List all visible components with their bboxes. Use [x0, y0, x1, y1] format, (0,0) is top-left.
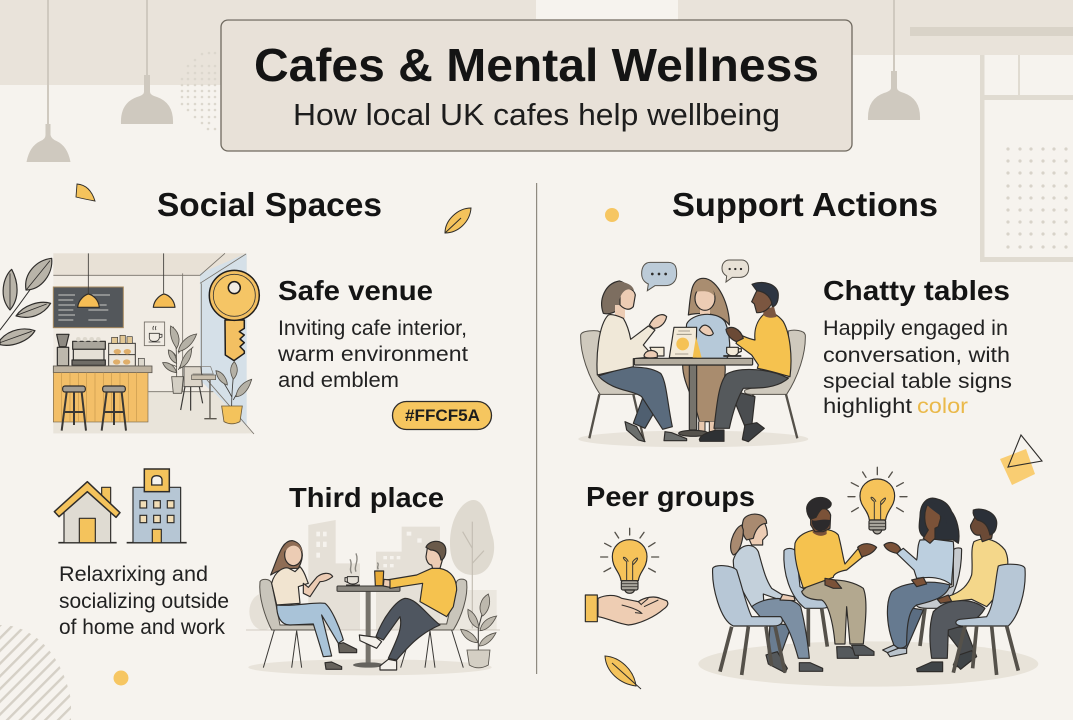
speech bubble beige [722, 260, 749, 282]
color tag pill: #FFCF5A [405, 407, 480, 425]
center divider [536, 183, 537, 674]
description: conversation, with [823, 343, 1010, 367]
bar stools [62, 386, 126, 431]
city backdrop [249, 500, 497, 630]
pastry case [109, 335, 144, 366]
decoration: yellow dot right [605, 208, 619, 222]
description: color [917, 394, 968, 418]
lamp: left [121, 0, 173, 124]
pendant lamps [78, 253, 175, 307]
lamp: far left [26, 0, 70, 162]
person: woman in blue [883, 498, 959, 657]
lamp: right [868, 0, 920, 120]
speech bubble blue [642, 262, 677, 291]
potted plant with yellow pot [216, 362, 252, 424]
espresso machine [72, 337, 105, 365]
background: ceiling bands [0, 0, 1073, 85]
text: third place description: of home and work [59, 615, 225, 639]
person: man in pale yellow with chair [917, 509, 1025, 675]
left chair [581, 331, 644, 441]
decoration: square and triangle [1000, 435, 1042, 485]
background: window frame [910, 27, 1073, 262]
chair behind yellow man [784, 548, 830, 647]
cups and steam [345, 553, 384, 586]
decoration: yellow leaf near heading [445, 208, 471, 233]
heading: Support Actions: Support Actions [672, 186, 938, 223]
icon: branch with leaves [0, 258, 52, 345]
illustration: third place scene [246, 500, 500, 675]
right chair [401, 579, 467, 668]
subheading: Third place: Third place [289, 482, 444, 513]
heading: Social Spaces: Social Spaces [157, 186, 382, 223]
icon: house [54, 482, 120, 543]
grinder [57, 334, 69, 366]
decoration: small yellow leaf [76, 184, 95, 201]
description: highlight [823, 394, 912, 418]
text: third place description: socializing outside [59, 589, 229, 613]
text: third place description: Relaxrixing and [59, 562, 208, 586]
woman sitting [271, 541, 357, 669]
bar counter [53, 366, 152, 422]
subtitle: How local UK cafes help wellbeing [293, 97, 780, 132]
title banner [221, 20, 852, 151]
subheading: Chatty tables [823, 275, 1010, 306]
subheading: Safe venue [278, 275, 433, 306]
menu chalkboard [53, 287, 123, 328]
description: Happily engaged in [823, 316, 1008, 340]
icon: golden key [209, 270, 259, 361]
description: special table signs [823, 369, 1012, 393]
description: warm environment [277, 342, 468, 366]
potted plant and seating [163, 326, 217, 419]
chair front left [713, 566, 785, 675]
potted plant [461, 594, 497, 668]
icon: office building [127, 469, 187, 543]
idea bulb [848, 467, 907, 534]
table [634, 327, 753, 436]
color tag pill [392, 402, 492, 430]
text block: chatty tables [823, 275, 1012, 418]
illustration: chatty table scene [578, 260, 808, 447]
person: woman with ponytail [731, 514, 823, 673]
person: bearded man in yellow [795, 497, 877, 658]
icon: bulb over open hand [585, 528, 668, 625]
subheading: Peer groups: Peer groups [586, 481, 755, 512]
table [337, 586, 400, 668]
description: and emblem [278, 368, 399, 392]
background: dots beside title [181, 52, 216, 130]
illustration: cafe interior [53, 253, 259, 434]
description: Inviting cafe interior, [278, 316, 467, 340]
text block: safe venue [277, 275, 468, 392]
background: window dot grid [1006, 147, 1068, 249]
right chair [743, 330, 805, 441]
man sitting [359, 541, 457, 670]
hand [585, 595, 668, 625]
framed cup picture [144, 322, 165, 346]
decoration: leaf bottom [605, 656, 641, 689]
illustration: peer group scene [698, 467, 1038, 687]
chair behind blue woman [916, 548, 962, 647]
bulb [612, 540, 647, 593]
left woman [597, 281, 687, 442]
rays [601, 528, 659, 572]
center woman [683, 278, 730, 432]
right man [699, 283, 791, 442]
left chair [260, 579, 315, 668]
decoration: hatched quarter circle [0, 620, 72, 720]
decoration: yellow dot left [114, 670, 128, 686]
title: Cafes & Mental Wellness [254, 39, 819, 91]
